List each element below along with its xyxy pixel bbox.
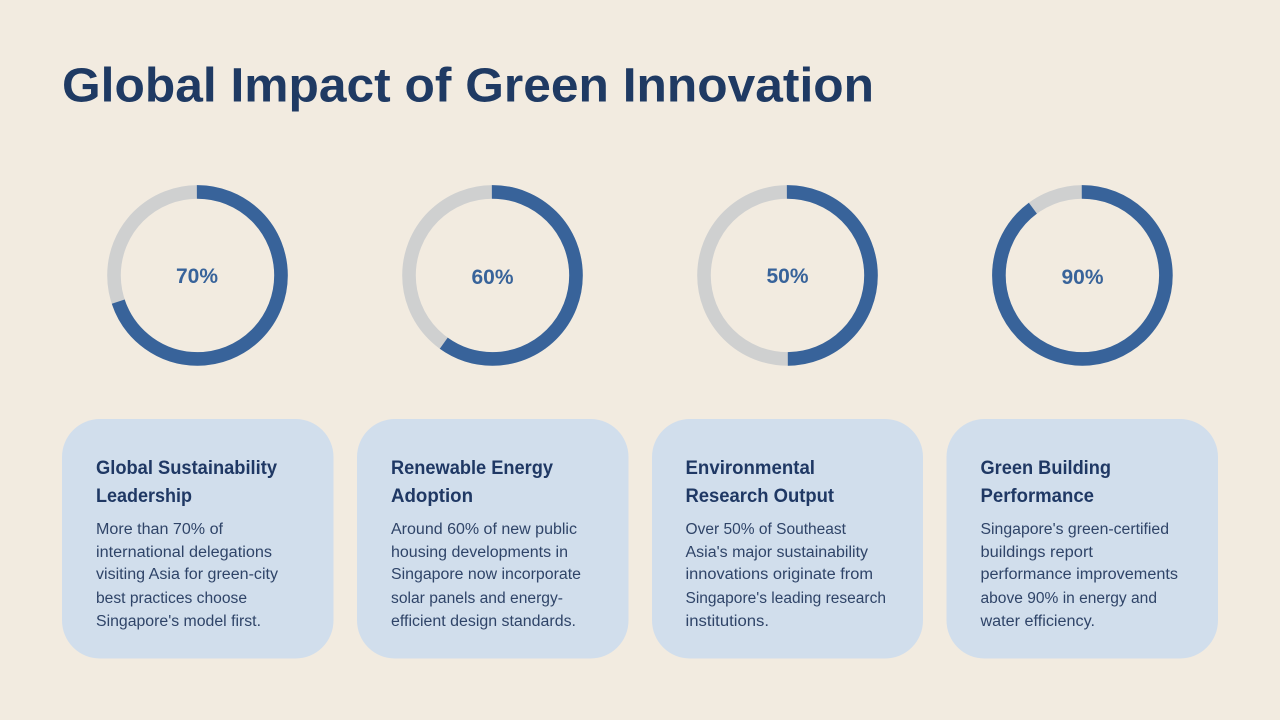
heading: Environmental Research Output: [686, 458, 835, 507]
text block: Renewable Energy Adoption description: Singapore now incorporate: [391, 566, 581, 583]
heading: Renewable Energy Adoption: [391, 458, 553, 507]
heading: Renewable Energy Adoption: Adoption: [391, 486, 473, 507]
text block: Environmental Research Output description: institutions.: [686, 613, 769, 630]
donut chart: 70%: 70%: [176, 265, 218, 288]
text block: Green Building Performance description: [979, 521, 1178, 630]
text block: Environmental Research Output description: Singapore's leading research: [686, 590, 886, 607]
title: Global Impact of Green Innovation: [62, 58, 874, 112]
donut chart: 60%: 60%: [472, 266, 514, 289]
text block: Global Sustainability Leadership description: international delegations: [96, 544, 272, 561]
text block: Environmental Research Output description: innovations originate from: [686, 566, 873, 583]
text block: Renewable Energy Adoption description: solar panels and energy-: [391, 590, 563, 607]
text block: Renewable Energy Adoption description: Around 60% of new public: [391, 521, 577, 538]
text block: Environmental Research Output description: Asia's major sustainability: [686, 544, 868, 561]
panel: Green Building Performance: [946, 419, 1218, 658]
text block: Renewable Energy Adoption description: efficient design standards.: [391, 613, 576, 630]
heading: Environmental Research Output: Environmental: [686, 458, 815, 479]
donut chart: 50%: 50%: [766, 265, 809, 288]
heading: Green Building Performance: Green Building: [980, 458, 1111, 479]
donut chart: 70%: [114, 192, 281, 359]
text block: Global Sustainability Leadership description: visiting Asia for green-city: [96, 566, 278, 583]
heading: Global Sustainability Leadership: Global Sustainability: [96, 458, 277, 479]
text block: Global Sustainability Leadership description: [96, 521, 278, 630]
text block: Green Building Performance description: buildings report: [980, 544, 1094, 561]
text block: Environmental Research Output description: [686, 521, 886, 630]
panel: Environmental Research Output: [652, 419, 923, 658]
panel: Global Sustainability Leadership: [62, 419, 334, 658]
text block: Global Sustainability Leadership description: Singapore's model first.: [96, 613, 261, 630]
text block: Renewable Energy Adoption description: [391, 521, 581, 630]
heading: Renewable Energy Adoption: Renewable Energy: [391, 458, 553, 479]
text block: Green Building Performance description: water efficiency.: [979, 613, 1095, 630]
heading: Global Sustainability Leadership: Leadership: [96, 486, 192, 507]
text block: Global Sustainability Leadership description: best practices choose: [96, 590, 247, 607]
heading: Global Sustainability Leadership: [96, 458, 277, 507]
heading: Green Building Performance: Performance: [980, 486, 1094, 507]
heading: Environmental Research Output: Research Output: [686, 486, 835, 507]
heading: Green Building Performance: [980, 458, 1111, 507]
text block: Green Building Performance description: performance improvements: [980, 566, 1178, 583]
donut chart: 90%: 90%: [1062, 266, 1104, 289]
panel: Renewable Energy Adoption: [357, 419, 628, 658]
donut chart: 50%: [704, 192, 871, 359]
text block: Global Sustainability Leadership description: More than 70% of: [96, 521, 224, 538]
text block: Green Building Performance description: Singapore's green-certified: [980, 521, 1169, 538]
text block: Green Building Performance description: above 90% in energy and: [980, 590, 1157, 607]
text block: Environmental Research Output description: Over 50% of Southeast: [686, 521, 847, 538]
text block: Renewable Energy Adoption description: housing developments in: [391, 544, 568, 561]
donut chart: 90%: [999, 192, 1166, 359]
donut chart: 60%: [409, 192, 576, 359]
